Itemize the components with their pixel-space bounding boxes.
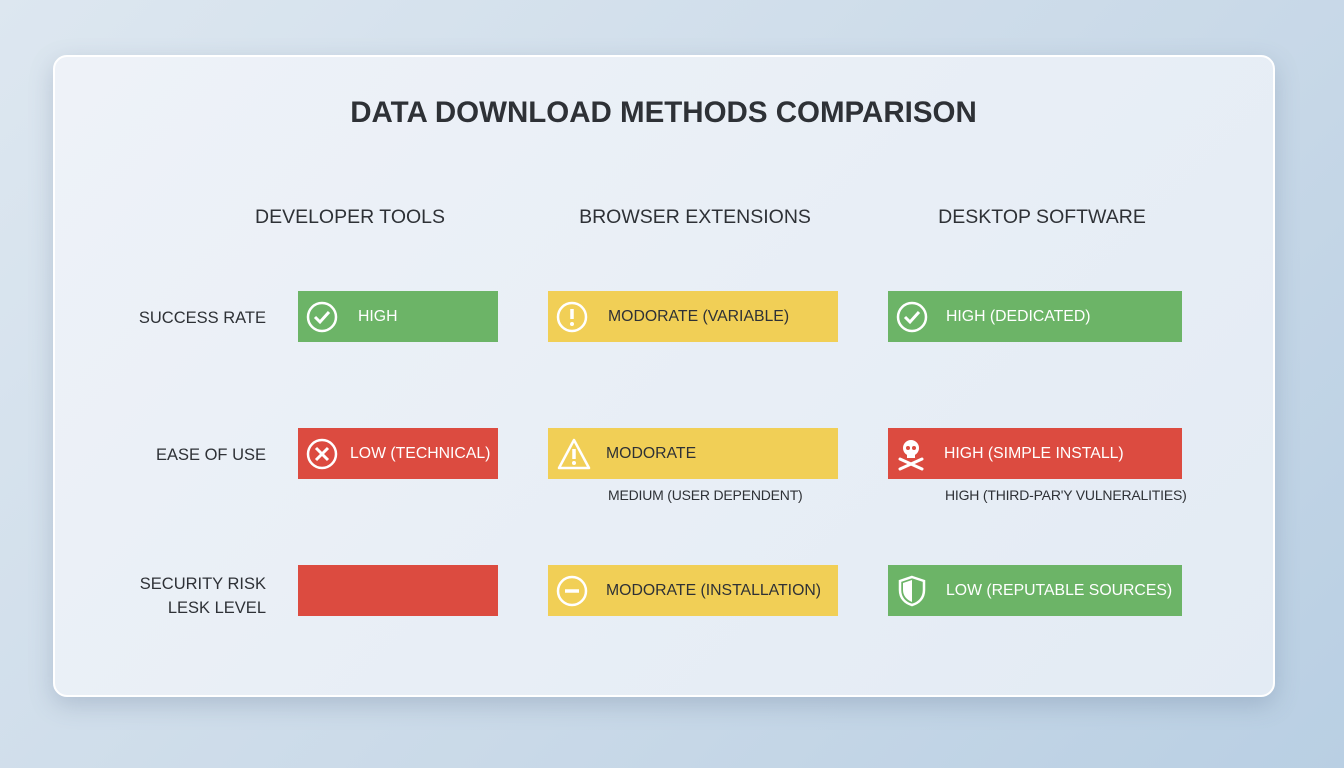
row label: success rate: SUCCESS RATE	[139, 309, 266, 327]
bar: ext success: MODORATE (VARIABLE)	[608, 308, 789, 324]
bar: dev success: HIGH	[358, 308, 398, 324]
bar: dev security	[298, 565, 498, 616]
bar: ext security: MODORATE (INSTALLATION)	[606, 582, 821, 598]
row label: security risk: SECURITY RISK	[140, 575, 266, 593]
bar: desktop success: HIGH (DEDICATED)	[946, 308, 1091, 324]
bar: ext success	[548, 291, 838, 342]
bar: dev ease: LOW (TECHNICAL)	[350, 444, 490, 462]
title: DATA DOWNLOAD METHODS COMPARISON	[350, 96, 977, 129]
header: browser extensions: BROWSER EXTENSIONS	[579, 206, 811, 228]
bar: ext ease: MODORATE	[606, 444, 696, 462]
bar: desktop security	[888, 565, 1182, 616]
bar: dev success	[298, 291, 498, 342]
bar: desktop ease: HIGH (SIMPLE INSTALL)	[944, 444, 1124, 462]
bar: dev ease	[298, 428, 498, 479]
bar: desktop success	[888, 291, 1182, 342]
header: developer tools: DEVELOPER TOOLS	[255, 206, 445, 228]
bar: desktop security: LOW (REPUTABLE SOURCES)	[946, 582, 1172, 598]
bar: ext security	[548, 565, 838, 616]
panel: main card	[53, 55, 1275, 697]
row label: security risk	[140, 575, 266, 617]
bar: ext ease	[548, 428, 838, 479]
note: desktop high: HIGH (THIRD-PAR'Y VULNERALITIES)	[945, 487, 1187, 503]
row label: ease of use: EASE OF USE	[156, 446, 266, 464]
note: ext medium: MEDIUM (USER DEPENDENT)	[608, 487, 803, 503]
header: desktop software: DESKTOP SOFTWARE	[938, 206, 1146, 228]
row label: security risk: LESK LEVEL	[168, 599, 266, 617]
bar: desktop ease	[888, 428, 1182, 479]
